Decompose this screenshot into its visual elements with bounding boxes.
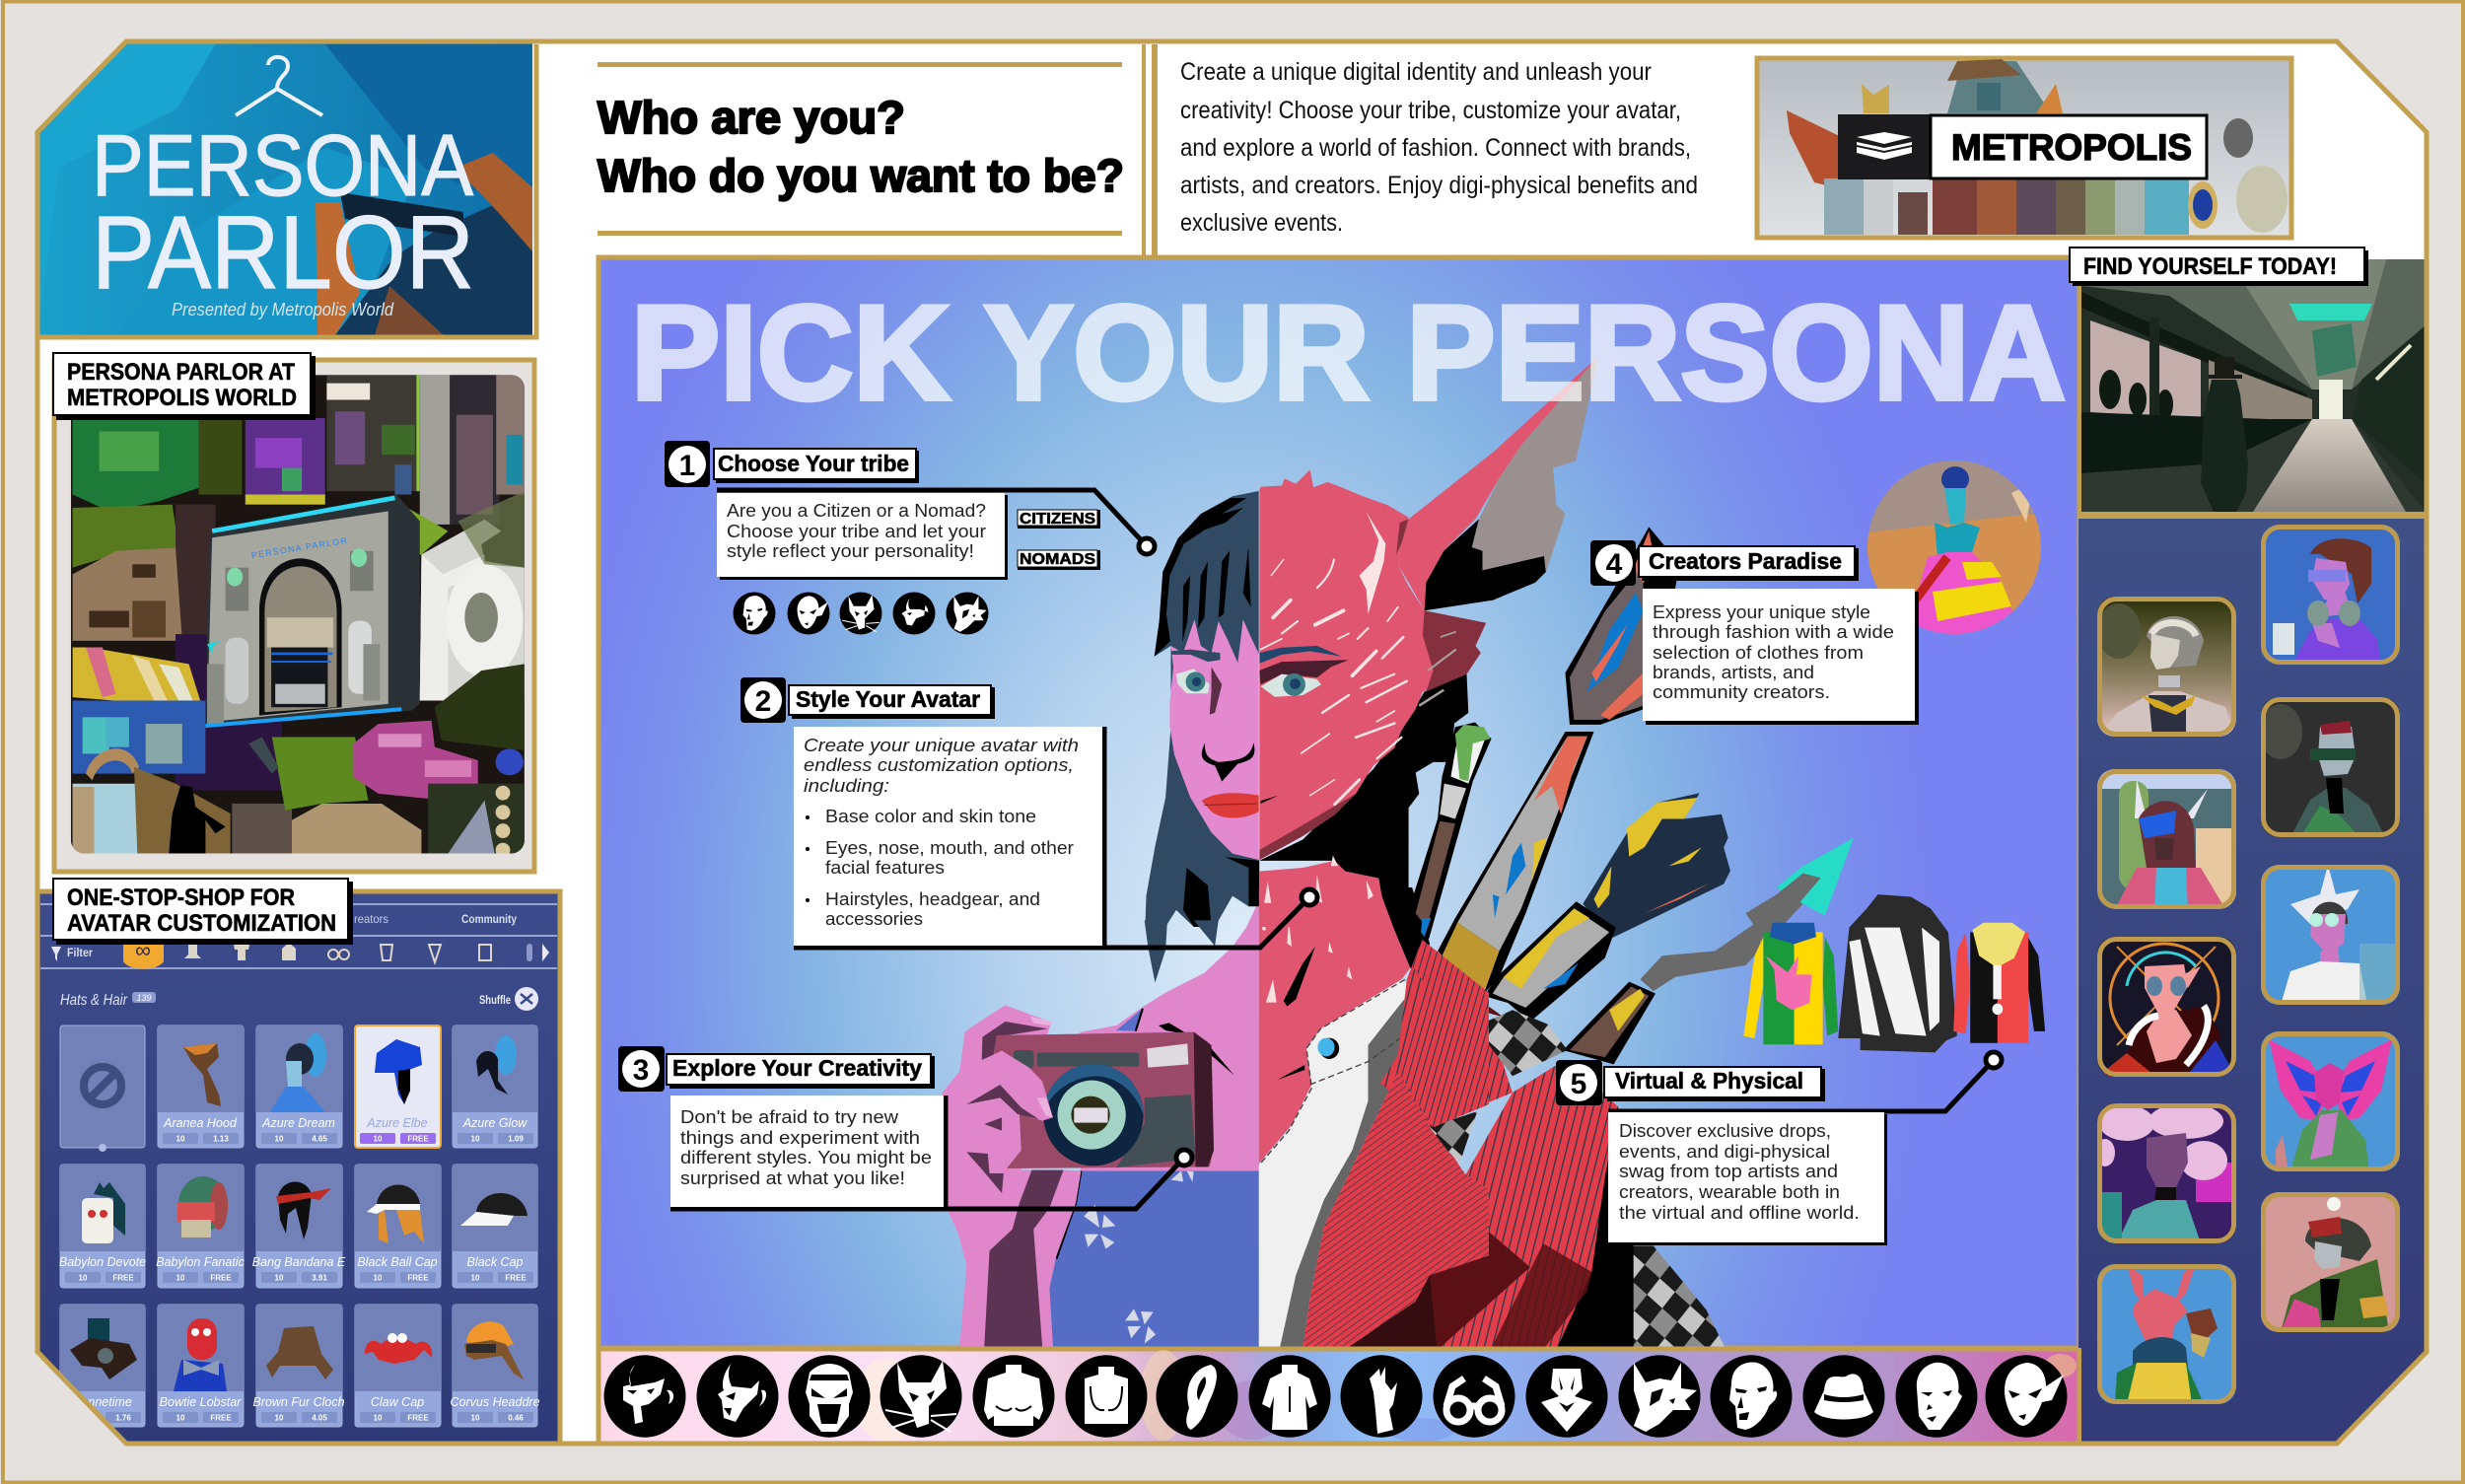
- category filter row: Filter: [67, 946, 93, 959]
- intro paragraph: Create a unique digital identity and unleash your: [1180, 58, 1652, 86]
- description box 3: things and experiment with: [680, 1128, 920, 1148]
- item card: Corvus Headdress: [450, 1305, 540, 1427]
- description box 1: style reflect your personality!: [727, 541, 974, 561]
- panel: pick your persona: [599, 257, 2079, 1350]
- item card: Azure Elbe selected: [355, 1025, 441, 1148]
- item card: Black Cap: FREE: [505, 1274, 527, 1282]
- item card: Babylon Devote: Babylon Devote: [59, 1255, 146, 1269]
- panel: avatar customization UI: [37, 891, 560, 1444]
- icon: mask: [789, 1355, 870, 1438]
- panel: Metropolis banner: [1757, 58, 2291, 238]
- item card: Brown Fur Cloche: Brown Fur Cloch: [252, 1395, 345, 1409]
- icon: alien: [1986, 1355, 2067, 1438]
- item card: Black Cap: 10: [471, 1274, 480, 1282]
- label 4: Creators Paradise: [1649, 548, 1842, 574]
- item card: Aranea Hood: Aranea Hood: [163, 1116, 238, 1130]
- description box 4: selection of clothes from: [1653, 643, 1864, 663]
- left body: shirt, torso, arm, camera: [942, 900, 1259, 1347]
- item card: Black Ball Cap: FREE: [407, 1274, 429, 1282]
- item card: Brown Fur Cloche: [252, 1305, 345, 1427]
- description box 4: [1643, 589, 1919, 725]
- item card: Claw Cap: FREE: [407, 1414, 429, 1422]
- left wall shop windows: [2090, 320, 2201, 419]
- description box 2: Base color and skin tone: [825, 807, 1036, 826]
- item card: Black Cap: Black Cap: [467, 1255, 524, 1269]
- description box 3: [670, 1095, 944, 1207]
- callout line 2: [794, 727, 1309, 948]
- callout line 3: [670, 1095, 1184, 1209]
- intro paragraph: artists, and creators. Enjoy digi-physical benefits and: [1180, 172, 1698, 199]
- item card: Babylon Fanatic: Babylon Fanatic: [156, 1255, 246, 1269]
- item card: Bang Bandana: 3.91: [312, 1274, 327, 1282]
- callout line 1: [717, 490, 1147, 546]
- brush: long salmon: [1438, 527, 1680, 996]
- description box 1: Are you a Citizen or a Nomad?: [727, 501, 986, 521]
- panel: avatar customization UI: Hats & Hair: [60, 992, 128, 1009]
- item card: Babylon Fanatic: 10: [176, 1274, 185, 1282]
- badge 1: 1: [679, 450, 695, 482]
- description box 2: Create your unique avatar with: [804, 736, 1079, 755]
- icon: rat: [880, 1355, 962, 1438]
- tag citizens: CITIZENS: [1020, 511, 1095, 528]
- icon: male chest: [972, 1355, 1055, 1438]
- badge 4: [1590, 540, 1636, 586]
- icon: elf face right: [696, 1355, 779, 1438]
- description box 3: Don't be afraid to try new: [680, 1107, 899, 1127]
- item card: Black Ball Cap: 10: [374, 1274, 383, 1282]
- panel: avatar customization UI: reators: [354, 912, 388, 926]
- panel: avatars gallery: [2078, 519, 2428, 1444]
- item card: Azure Dream: 4.65: [312, 1134, 327, 1144]
- label: persona parlor at metropolis world: METROPOLIS WORLD: [67, 385, 297, 411]
- item card: Azure Glow: Azure Glow: [462, 1116, 528, 1130]
- description box 2: Eyes, nose, mouth, and other: [825, 838, 1074, 858]
- label: one-stop-shop: [53, 879, 353, 945]
- description box 5: Discover exclusive drops,: [1619, 1121, 1831, 1141]
- label: persona parlor at metropolis world: PERSONA PARLOR AT: [67, 359, 295, 386]
- avatar left 4: [2095, 1103, 2236, 1243]
- panel: world map image: [54, 360, 534, 872]
- logo wordmark: Presented by Metropolis World: [172, 300, 394, 319]
- marker dots: [1139, 538, 2002, 1166]
- item card: Claw Cap: Claw Cap: [371, 1395, 424, 1409]
- left hair and face: [1145, 491, 1259, 927]
- callout line 5: [1608, 1060, 1994, 1111]
- panel: avatar customization UI: 139: [136, 993, 152, 1003]
- description box 4: brands, artists, and: [1653, 663, 1814, 682]
- description box 3: different styles. You might be: [680, 1148, 932, 1167]
- icon: hand: [1341, 1355, 1422, 1438]
- description box 2: endless customization options,: [804, 755, 1074, 775]
- icon: hat: [1802, 1355, 1885, 1438]
- label 4: [1639, 546, 1859, 581]
- gold lines around logo: [37, 44, 536, 337]
- item card: none: [60, 1025, 145, 1152]
- badge 2: [740, 677, 786, 723]
- description box 5: the virtual and offline world.: [1619, 1203, 1860, 1223]
- paint brushes: [1380, 527, 2045, 1350]
- item card: Azure Glow: 1.09: [508, 1134, 524, 1144]
- brush: small green: [1408, 722, 1492, 940]
- label: one-stop-shop: ONE-STOP-SHOP FOR: [67, 884, 295, 911]
- badge 5: [1556, 1060, 1602, 1105]
- hoodie: green yellow: [1743, 923, 1838, 1044]
- avatar in circle: creator: [1867, 460, 2042, 635]
- avatar left 3: [2097, 937, 2236, 1077]
- icon: hanger: [236, 57, 322, 115]
- item card: Azure Dream: 10: [275, 1134, 284, 1144]
- badge 3: [618, 1046, 665, 1092]
- item card: Azure Dream: [256, 1025, 342, 1148]
- item card: Brown Fur Cloche: 10: [275, 1414, 284, 1422]
- item card: Babylon Devote: FREE: [112, 1274, 134, 1282]
- description box 4: through fashion with a wide: [1653, 622, 1894, 642]
- hair strand tips: [1145, 920, 1219, 983]
- label 5: Virtual & Physical: [1615, 1068, 1803, 1094]
- logo wordmark: PERSONA: [92, 116, 473, 214]
- avatar left 1: [2097, 597, 2236, 737]
- description box 2: accessories: [825, 909, 923, 929]
- item card: Bowtie Lobstar: 10: [176, 1414, 185, 1422]
- item card: Bang Bandana: [252, 1165, 346, 1288]
- avatar right 2: [2259, 697, 2400, 837]
- badge 5: 5: [1571, 1068, 1586, 1100]
- item card: Bonnetime: 1.76: [115, 1414, 131, 1422]
- figure in corridor: [2201, 380, 2248, 512]
- step 4: creators paradise: [1590, 540, 1919, 725]
- camera: [993, 1032, 1214, 1168]
- item card: Bang Bandana: 10: [275, 1274, 284, 1282]
- jacket left: [1303, 940, 1489, 1347]
- description box 5: [1608, 1112, 1887, 1245]
- description box 2: [794, 727, 1102, 946]
- tribe icons row: [734, 592, 988, 635]
- description box 5: swag from top artists and: [1619, 1162, 1838, 1181]
- intro paragraph: and explore a world of fashion. Connect with brands,: [1180, 134, 1691, 162]
- item card: Corvus Headdress: Corvus Headdre: [450, 1395, 540, 1409]
- item card: Black Cap: [453, 1165, 537, 1288]
- illustration: Persona Parlor building: [71, 375, 525, 858]
- item card: Black Ball Cap: Black Ball Cap: [357, 1255, 438, 1269]
- item card: Claw Cap: 10: [374, 1414, 383, 1422]
- panel: find yourself image: [2081, 259, 2426, 519]
- label: find yourself today: [2070, 247, 2368, 286]
- description box 2: including:: [804, 776, 889, 796]
- brush: palette knife: [1563, 838, 1854, 1064]
- panel: Persona Parlor logo: [37, 41, 532, 335]
- icon: back: [1248, 1355, 1331, 1438]
- item card: Bang Bandana: Bang Bandana E: [252, 1255, 346, 1269]
- panel: avatar customization UI: Shuffle: [479, 993, 511, 1007]
- floor: [2081, 419, 2426, 512]
- avatar left 2: [2097, 769, 2236, 909]
- panel: avatar customization UI: Community: [461, 912, 517, 926]
- item card: Black Ball Cap: [355, 1165, 441, 1288]
- description box 1: Choose your tribe and let your: [727, 522, 986, 541]
- avatar right 3: [2261, 865, 2400, 1005]
- item card: Azure Elbe selected: FREE: [407, 1134, 429, 1144]
- item card: Corvus Headdress: 0.46: [508, 1414, 524, 1422]
- label: one-stop-shop: AVATAR CUSTOMIZATION: [67, 910, 336, 937]
- label: persona parlor at metropolis world: [53, 353, 316, 420]
- double divider: [1142, 44, 1158, 256]
- item card: Bowtie Lobstar: FREE: [210, 1414, 232, 1422]
- item card: Corvus Headdress: 10: [471, 1414, 480, 1422]
- tag nomads: NOMADS: [1020, 551, 1095, 568]
- description box 5: events, and digi-physical: [1619, 1142, 1830, 1162]
- counter left: [2081, 412, 2312, 473]
- icon: bald man: [1710, 1355, 1793, 1438]
- intro paragraph: creativity! Choose your tribe, customize your avatar,: [1180, 97, 1681, 124]
- label 3: Explore Your Creativity: [672, 1055, 922, 1081]
- description box 5: creators, wearable both in: [1619, 1182, 1840, 1202]
- icon: wolf: [1619, 1355, 1700, 1438]
- logo wordmark: PARLOR: [92, 195, 474, 311]
- avatar left 5: [2097, 1264, 2236, 1404]
- avatar right 1: [2261, 525, 2400, 665]
- item card: Babylon Devote: 10: [79, 1274, 88, 1282]
- item card: Aranea Hood: [158, 1025, 244, 1148]
- item card: Azure Dream: Azure Dream: [261, 1116, 335, 1130]
- item card: Azure Elbe selected: Azure Elbe: [366, 1116, 428, 1130]
- item card: Brown Fur Cloche: 4.05: [312, 1414, 327, 1422]
- icon: glasses: [1434, 1355, 1514, 1438]
- brush: yellow navy: [1484, 793, 1730, 1022]
- label 5: [1604, 1067, 1825, 1101]
- description box 2: Hairstyles, headgear, and: [825, 889, 1040, 909]
- heading: who are you: Who do you want to be?: [598, 150, 1124, 201]
- icon: man alt: [1895, 1355, 1978, 1438]
- heading: who are you: Who are you?: [598, 92, 905, 143]
- avatar right 4: [2261, 1031, 2400, 1171]
- step 3: explore your creativity: [618, 1046, 944, 1207]
- icon strip: [599, 1349, 2079, 1444]
- description box 1: [717, 493, 1008, 580]
- icon: ear: [1156, 1355, 1238, 1438]
- item card: Aranea Hood: 1.13: [213, 1134, 229, 1144]
- neck and white collar: [1259, 887, 1430, 1347]
- jacket right and black skirt: [1380, 940, 1726, 1350]
- heading: who are you: [598, 62, 1124, 236]
- hoodie: black white: [1838, 894, 1957, 1052]
- shirt flowers: [1084, 1170, 1194, 1344]
- item card: Babylon Fanatic: FREE: [210, 1274, 232, 1282]
- icon: elf face left: [603, 1355, 686, 1438]
- item card: Bowtie Lobstar: [158, 1305, 244, 1427]
- label 2: [789, 685, 995, 719]
- item card: Bonnetime: [60, 1305, 145, 1427]
- label 1: Choose Your tribe: [718, 451, 909, 476]
- item card: Azure Glow: 10: [471, 1134, 480, 1144]
- item card: Azure Elbe selected: 10: [374, 1134, 383, 1144]
- fingers: [966, 1017, 1053, 1193]
- item card: Aranea Hood: 10: [176, 1134, 185, 1144]
- label: find yourself today: FIND YOURSELF TODAY!: [2083, 253, 2337, 280]
- icon: female chest: [1065, 1355, 1148, 1438]
- item card: Babylon Fanatic: [156, 1165, 246, 1288]
- black mane behind beast: [1259, 674, 1468, 927]
- badge 1: [665, 441, 710, 487]
- item card: Azure Glow: [453, 1025, 537, 1148]
- category filter row: [51, 938, 549, 968]
- item card: Bowtie Lobstar: Bowtie Lobstar: [160, 1395, 242, 1409]
- description box 4: Express your unique style: [1653, 602, 1870, 622]
- illustration: half woman half beast: [942, 356, 2045, 1350]
- badge 4: 4: [1606, 548, 1623, 581]
- hoodie: red black: [1953, 923, 2045, 1043]
- step 1: choose your tribe: [665, 441, 1100, 635]
- logo: Metropolis: METROPOLIS: [1951, 127, 2192, 168]
- hoodie trio: [1743, 894, 2045, 1052]
- step 2: style your avatar: [740, 677, 1102, 946]
- item card: Claw Cap: [355, 1305, 441, 1427]
- title: pick your persona: PICK YOUR PERSONA: [631, 278, 2066, 428]
- label 3: [667, 1054, 935, 1089]
- description box 3: surprised at what you like!: [680, 1168, 905, 1188]
- intro paragraph: [1180, 58, 1698, 237]
- neck fur upper and jacket: [1259, 855, 1387, 927]
- description box 4: community creators.: [1653, 682, 1830, 702]
- step 5: virtual and physical: [1556, 1060, 1887, 1245]
- illustration: Persona Parlor building: PERSONA PARLOR: [250, 535, 347, 560]
- label 2: Style Your Avatar: [796, 686, 980, 712]
- avatar right 5: [2261, 1192, 2400, 1332]
- item card: Bonnetime: Bonnetime: [73, 1395, 132, 1409]
- logo wordmark: [92, 116, 474, 319]
- beast face with ear: [1259, 356, 1598, 861]
- description box 2: facial features: [825, 858, 945, 878]
- badge 2: 2: [755, 685, 771, 718]
- item card: Babylon Devote: [59, 1165, 146, 1288]
- logo: Metropolis: [1838, 114, 2207, 179]
- icon: collar: [1526, 1355, 1607, 1438]
- intro paragraph: exclusive events.: [1180, 209, 1343, 237]
- corridor ceiling: [2081, 259, 2426, 389]
- badge 3: 3: [633, 1054, 649, 1087]
- category filter row: ∞: [135, 938, 151, 962]
